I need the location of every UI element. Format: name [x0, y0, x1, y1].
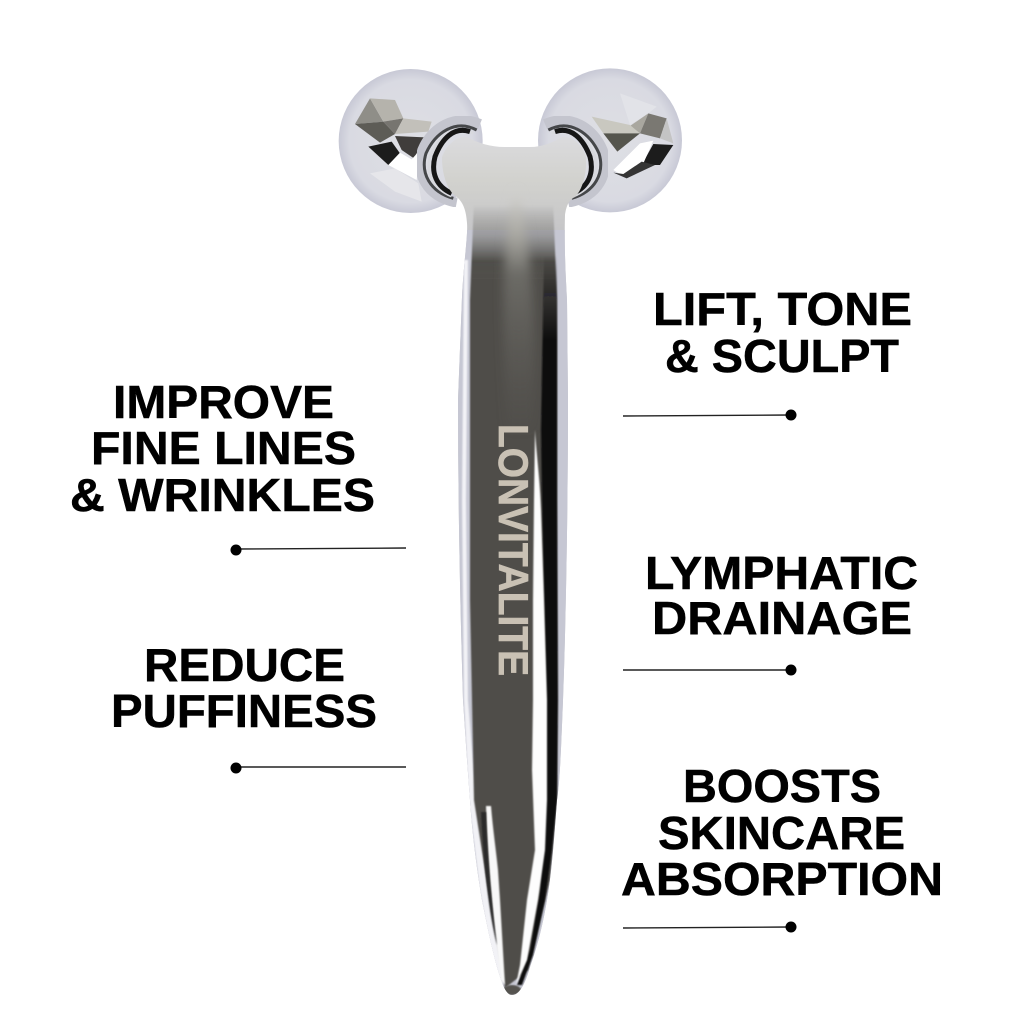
right roller ball [538, 68, 682, 212]
lighter central arch [500, 223, 535, 377]
left roller ball [339, 69, 483, 213]
connector: boosts skincare [623, 922, 796, 932]
engraved brand name: LONVITALITE [490, 424, 537, 676]
label: lift tone and sculpt: LIFT, TONE [653, 283, 912, 335]
tip shading [503, 985, 521, 995]
label: lymphatic drainage [645, 547, 918, 644]
connector: lift tone [623, 410, 796, 420]
label: improve fine lines and wrinkles: FINE LINES [91, 422, 356, 474]
label: improve fine lines and wrinkles: & WRINKLES [70, 469, 375, 521]
product: facial roller [339, 68, 682, 1010]
label: boosts skincare absorption: BOOSTS [683, 760, 881, 812]
label: improve fine lines and wrinkles: IMPROVE [113, 376, 334, 428]
connector: improve fine lines [230, 544, 406, 556]
label: lift tone and sculpt: & SCULPT [665, 330, 899, 382]
label: reduce puffiness [111, 639, 377, 737]
left highlight along edge [462, 260, 503, 985]
right black band [517, 255, 558, 985]
dark central reflection [470, 200, 557, 988]
label: lift tone and sculpt [653, 283, 912, 382]
label: boosts skincare absorption [621, 760, 943, 905]
handle body [442, 142, 586, 995]
right ring collar [545, 120, 605, 203]
label: boosts skincare absorption: SKINCARE [658, 807, 905, 859]
connector: reduce puffiness [230, 762, 406, 774]
left ring collar [420, 120, 480, 203]
connector: lymphatic drainage [623, 664, 796, 676]
label: lymphatic drainage: LYMPHATIC [645, 547, 918, 599]
left dark pinstripe [481, 812, 497, 945]
label: boosts skincare absorption: ABSORPTION [621, 853, 943, 905]
left white streak [486, 806, 505, 985]
label: reduce puffiness: REDUCE [144, 639, 345, 691]
label: lymphatic drainage: DRAINAGE [652, 592, 912, 644]
right white streak [516, 430, 547, 985]
label: improve fine lines and wrinkles [70, 376, 375, 521]
label: reduce puffiness: PUFFINESS [111, 685, 377, 737]
